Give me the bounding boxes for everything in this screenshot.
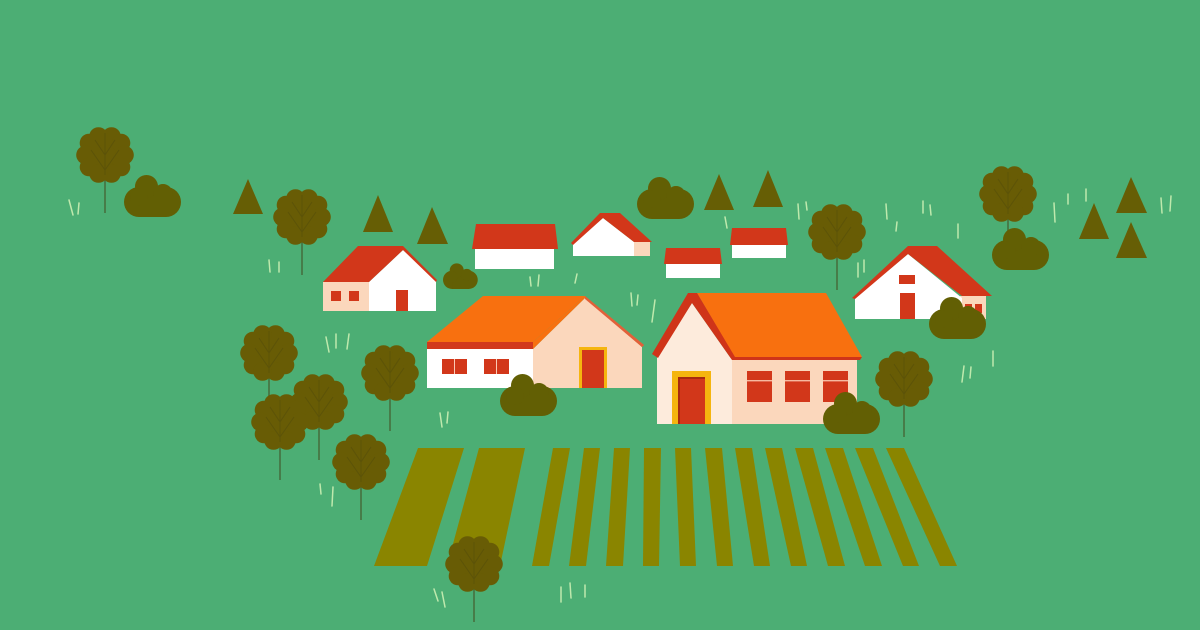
house: large centre-right xyxy=(652,293,862,424)
bush xyxy=(637,177,694,219)
tree xyxy=(251,394,309,480)
tree xyxy=(76,127,134,213)
crop field xyxy=(374,448,957,566)
bush xyxy=(823,392,880,434)
bush xyxy=(929,297,986,339)
house: right xyxy=(852,246,992,319)
tree xyxy=(445,536,503,622)
bush xyxy=(500,374,557,416)
bush xyxy=(124,175,181,217)
tree xyxy=(273,189,331,275)
tree xyxy=(808,204,866,290)
house: back row 1 xyxy=(472,224,558,269)
tree xyxy=(361,345,419,431)
house: back left xyxy=(323,246,437,311)
tree xyxy=(240,325,298,411)
bush xyxy=(992,228,1049,270)
bush xyxy=(443,263,478,289)
house: back row 3 xyxy=(664,248,722,278)
tree xyxy=(332,434,390,520)
tree xyxy=(290,374,348,460)
house: large centre-left xyxy=(427,296,644,388)
pine trees xyxy=(233,170,1147,258)
tree xyxy=(875,351,933,437)
tree xyxy=(979,166,1037,252)
house: back row 2 xyxy=(571,213,652,256)
house: back row 4 xyxy=(730,228,788,258)
grass tufts xyxy=(69,189,1171,607)
